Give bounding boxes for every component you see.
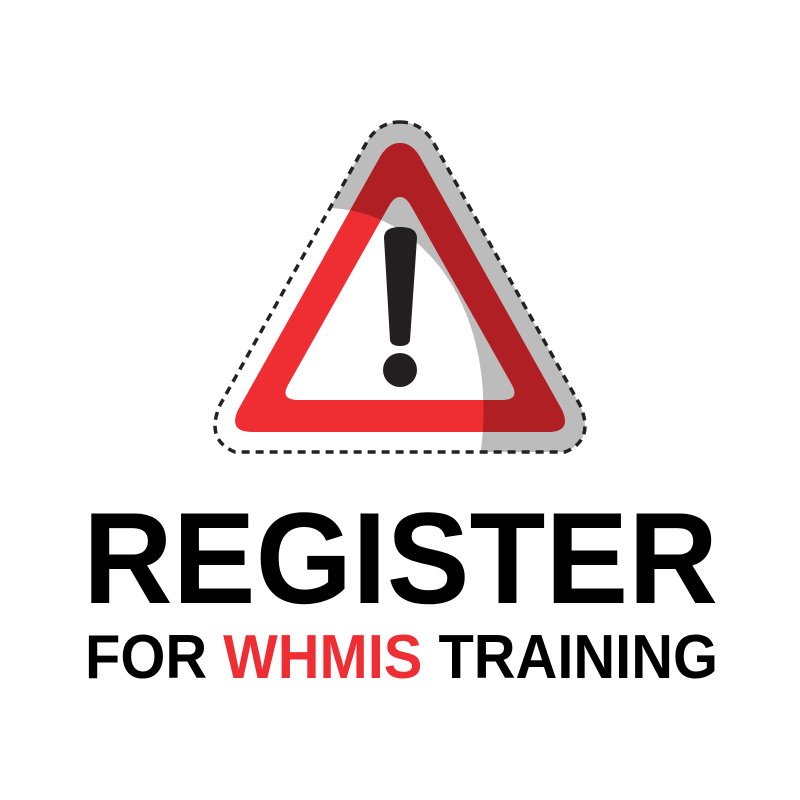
exclamation mark [383, 227, 417, 387]
dashed outline [215, 122, 585, 452]
subtitle: FOR WHMIS TRAINING: FOR WHMIS TRAINING [85, 623, 718, 692]
shaded part of frame [350, 143, 565, 432]
shaded inner [381, 197, 514, 400]
title: REGISTER: REGISTER [83, 485, 718, 631]
red triangle frame [235, 143, 565, 432]
sticker gray shadow [332, 122, 585, 452]
icon: warning sign [213, 120, 587, 454]
infographic [88, 120, 716, 678]
